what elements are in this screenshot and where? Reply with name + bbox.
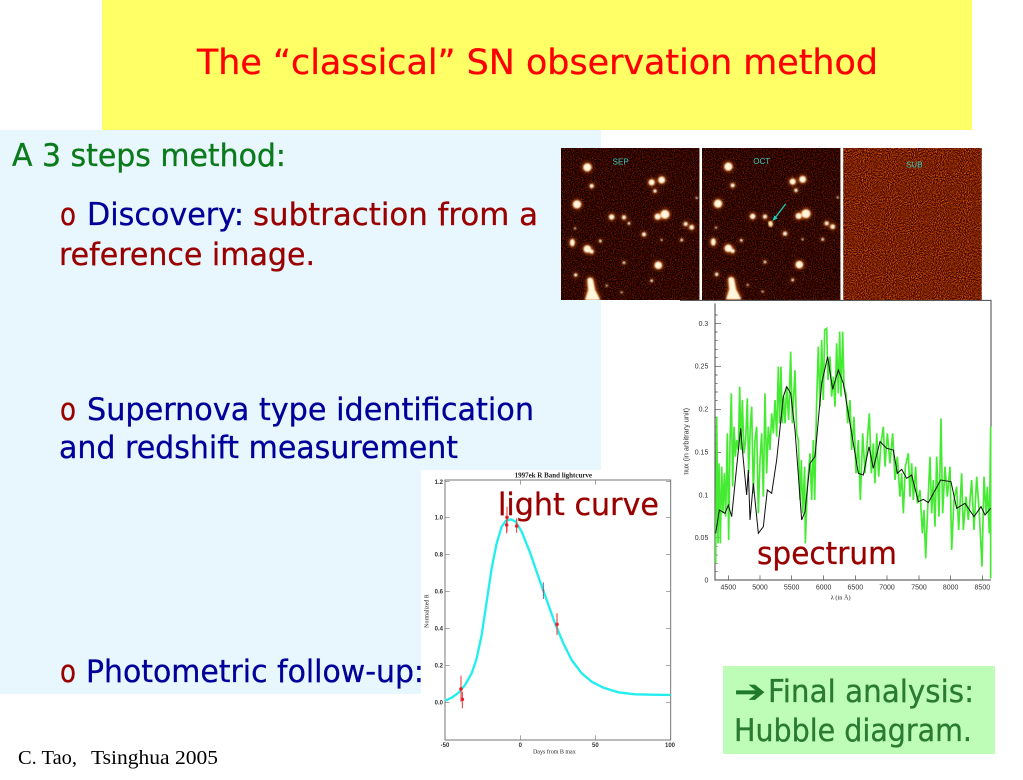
chart: spectrum: 0.2 [699, 407, 708, 414]
chart: light curve: Days from B max [533, 749, 576, 756]
image: SUB [843, 148, 982, 300]
fitted curve [445, 519, 671, 701]
chart: spectrum: 0.15 [695, 450, 708, 457]
label: spectrum: spectrum [757, 536, 897, 572]
chart: light curve: Normalized R [424, 594, 430, 628]
chart: spectrum: 7500 [911, 584, 927, 591]
text: step 1 discovery [59, 197, 538, 273]
text: step 3 follow-up: Photometric follow-up: [86, 654, 424, 690]
text: step 1 discovery: Discovery: [87, 197, 244, 233]
green observed spectrum [716, 328, 991, 578]
text: step 3 follow-up: o [60, 654, 76, 690]
text: step 1 discovery: subtraction from a [253, 197, 538, 233]
chart: spectrum: 5500 [784, 584, 800, 591]
label: light curve: light curve [498, 487, 659, 523]
chart: spectrum: 8000 [943, 584, 959, 591]
panel: method steps background [0, 130, 601, 694]
chart: spectrum: 7000 [879, 584, 895, 591]
text: three steps heading: A 3 steps method: [12, 138, 286, 174]
text: step 1 discovery: o [60, 197, 76, 233]
images: SEP OCT SUB subtraction panels [561, 148, 982, 300]
image: OCT [702, 148, 840, 300]
title banner [102, 0, 972, 130]
chart: spectrum: 5000 [752, 584, 768, 591]
image: SUB: SUB [906, 161, 923, 170]
title: The “classical” SN observation method [196, 43, 878, 83]
chart: spectrum: flux (in arbitrary unit) [681, 408, 690, 475]
chart: spectrum: 4500 [721, 584, 736, 591]
image: SEP [561, 148, 699, 300]
chart: light curve: 1.0 [435, 516, 444, 522]
text: step 2 identification [59, 392, 534, 466]
chart: spectrum: 0.25 [695, 364, 708, 371]
black smoothed spectrum [716, 357, 991, 533]
chart: light curve: 0.4 [435, 626, 444, 632]
callout: final analysis: Final analysis: [768, 674, 974, 710]
chart: spectrum: 0 [704, 578, 708, 585]
footer credit: C. Tao, [18, 747, 77, 769]
chart: light curve: 1.2 [435, 480, 444, 486]
chart: spectrum: 0.3 [699, 321, 708, 328]
chart: spectrum [680, 300, 991, 609]
text: step 2 identification: Supernova type identification [87, 392, 534, 428]
callout: final analysis: Hubble diagram. [734, 713, 972, 749]
text: step 2 identification: and redshift measurement [59, 430, 458, 466]
chart: light curve: 0.2 [435, 664, 444, 670]
chart: spectrum: 6000 [816, 584, 832, 591]
chart: light curve: 1997ek R Band lightcurve [515, 471, 592, 479]
chart: spectrum: 0.1 [699, 492, 708, 499]
chart: light curve [421, 470, 684, 760]
data points [460, 507, 558, 708]
chart: spectrum: 0.05 [695, 535, 708, 542]
callout: final analysis: ➔ [734, 674, 766, 710]
chart: spectrum: λ (in Å) [831, 594, 851, 602]
chart: light curve: 50 [592, 743, 599, 749]
footer credit: Tsinghua 2005 [91, 747, 218, 769]
text: step 1 discovery: reference image. [59, 237, 315, 273]
chart: light curve: 100 [665, 743, 676, 749]
image: OCT: OCT [753, 157, 770, 166]
chart: spectrum: 8500 [975, 584, 990, 591]
chart: light curve: 0.8 [435, 552, 444, 558]
callout: final analysis [723, 666, 995, 754]
chart: light curve: 0 [519, 743, 523, 749]
footer credit [18, 747, 218, 769]
chart: light curve: 0.0 [435, 700, 444, 706]
image: SEP: SEP [613, 158, 629, 167]
text: step 2 identification: o [60, 392, 76, 428]
chart: light curve: -50 [441, 743, 450, 749]
chart: light curve: 0.6 [435, 590, 444, 596]
chart: spectrum: 6500 [848, 584, 863, 591]
